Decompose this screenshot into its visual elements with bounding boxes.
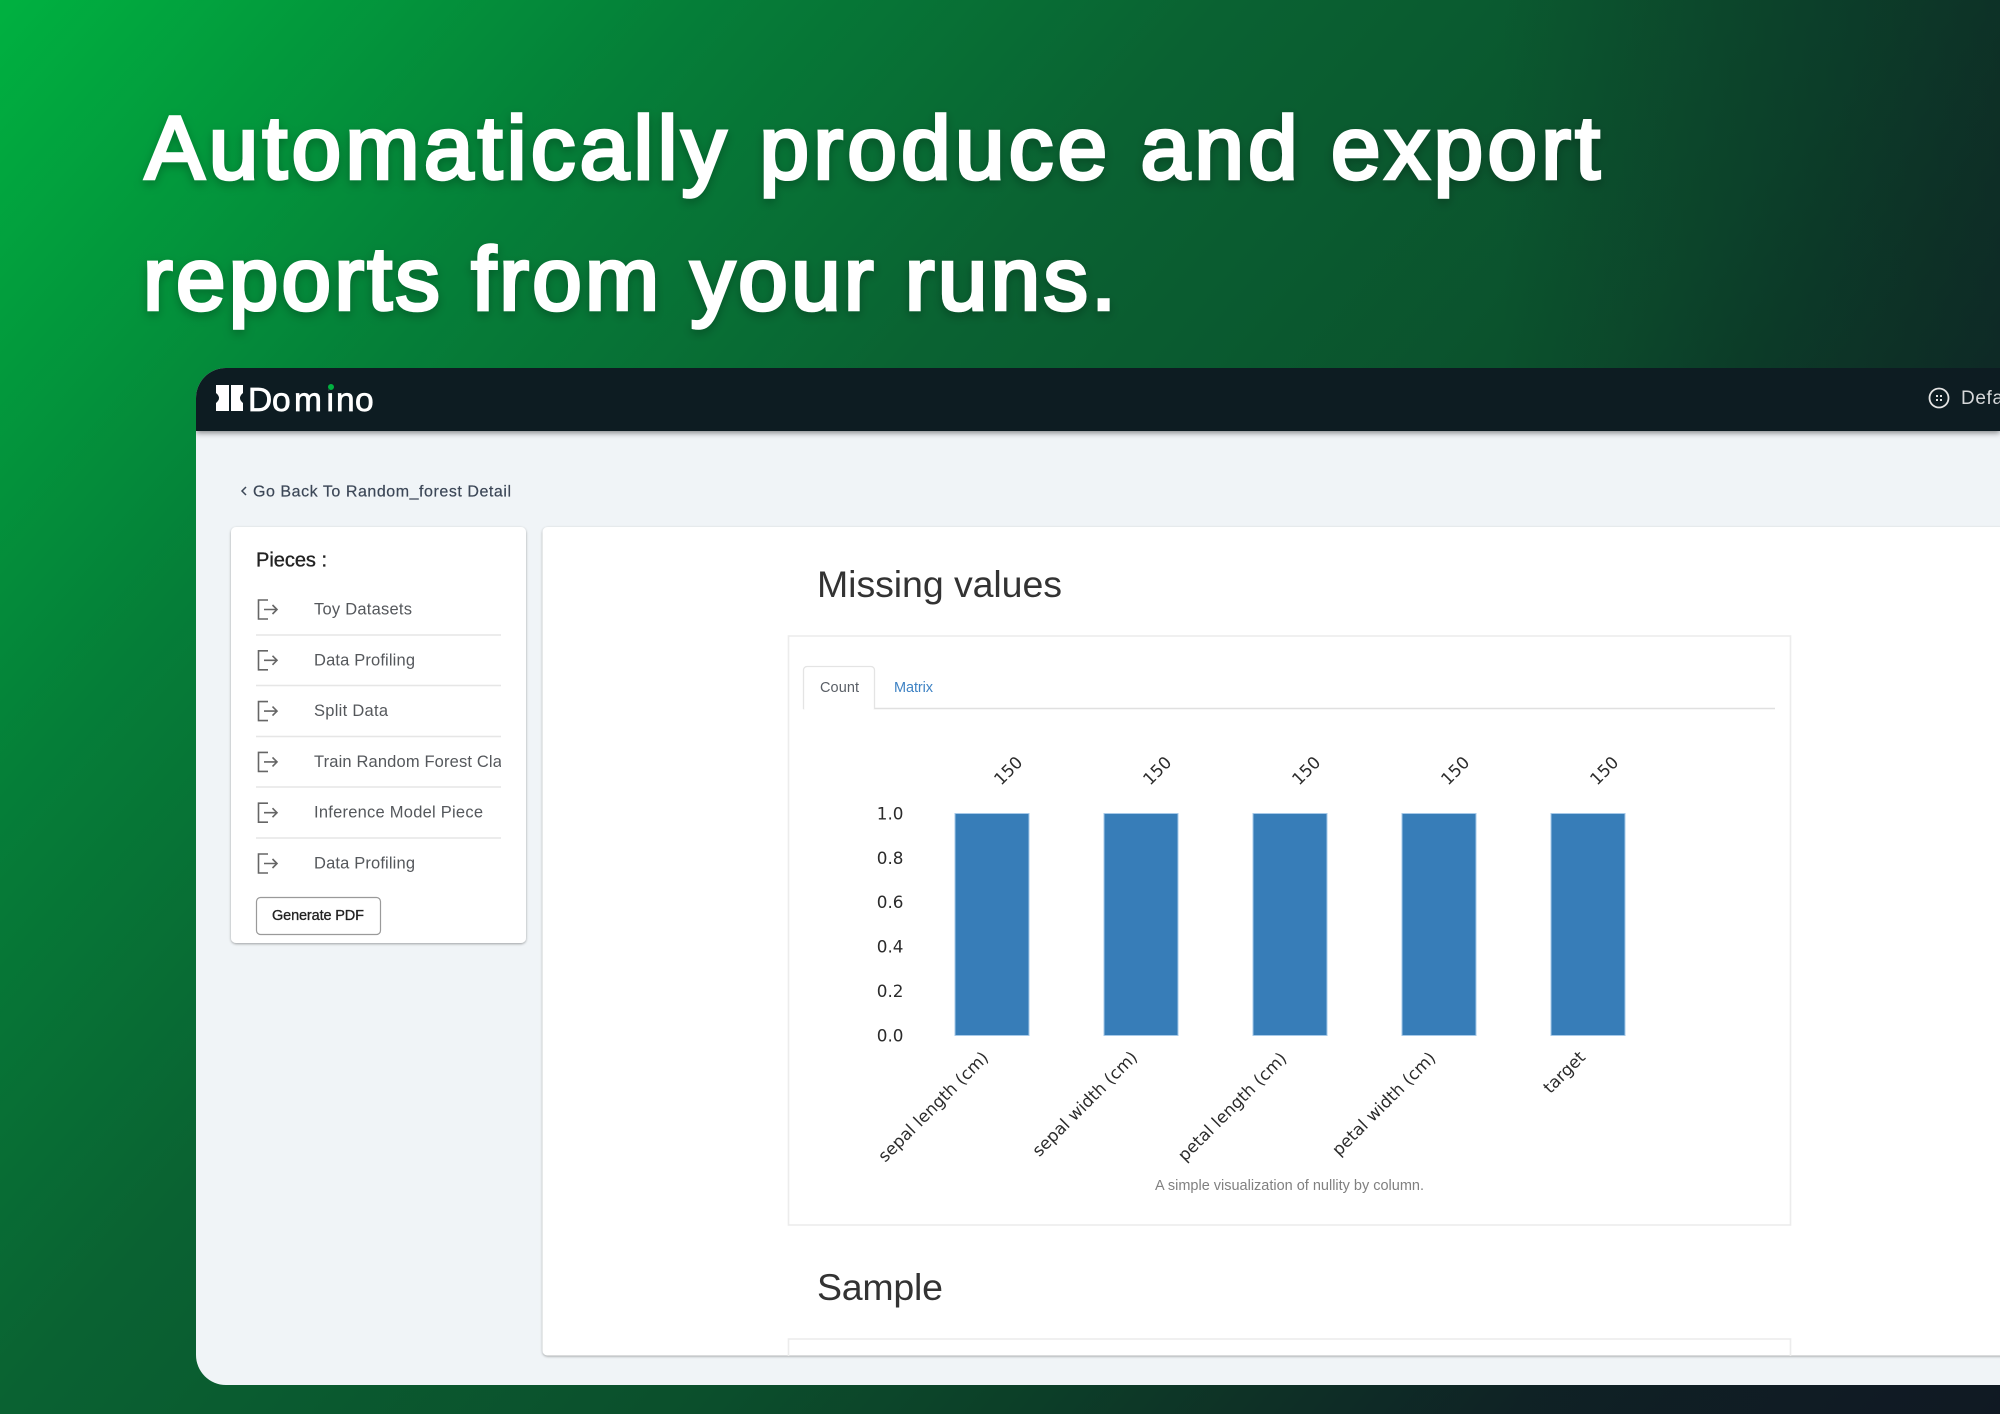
bar value labels: 150 [990,752,1026,789]
x axis labels: sepal length (cm) [874,1047,992,1166]
generate PDF button [256,898,380,934]
y axis labels: 0.2 [877,981,904,1001]
bar value labels: 150 [1139,752,1175,789]
panel: sample table container [788,1338,1792,1356]
y axis labels: 0.6 [877,892,904,912]
bar chart [874,752,1625,1166]
y axis labels: 0.0 [877,1026,904,1046]
x axis labels: petal width (cm) [1328,1048,1439,1159]
icon: workspace [1930,388,1948,408]
panel: chart container [788,636,1790,1225]
logo green dot [328,384,334,390]
top navigation bar [196,368,2000,431]
piece list: Data Profiling [314,652,415,670]
title [143,98,1600,328]
x axis labels [874,1047,1589,1166]
tabs [803,666,1775,710]
piece list: Train Random Forest Classifier [314,753,546,771]
panel: pieces sidebar [231,527,546,943]
panel: app window [196,368,2000,1399]
bar value labels: 150 [1586,752,1622,789]
heading: missing values: Missing values [817,563,1062,605]
y axis labels: 1.0 [877,804,904,824]
bar value labels: 150 [1437,752,1473,789]
bar value labels: 150 [1288,752,1324,789]
heading: sample: Sample [817,1266,943,1308]
x axis labels: sepal width (cm) [1028,1047,1141,1160]
panel: report content [542,527,2000,1399]
piece list: Split Data [314,702,389,720]
icon: Domino logo mark [216,385,243,411]
piece list: Toy Datasets [314,600,412,618]
x axis labels: petal length (cm) [1174,1048,1290,1165]
y axis labels: 0.4 [877,936,904,956]
window background [196,368,2000,1385]
sidebar heading: Pieces : [256,550,327,572]
logo wordmark: Domino [248,382,374,419]
back link: Go Back To Random_forest Detail [253,484,511,500]
bar value labels [994,757,1618,785]
piece list: Data Profiling [314,854,415,872]
piece list: Inference Model Piece [314,804,483,822]
generate PDF button: Generate PDF [272,908,364,924]
piece list [256,599,501,874]
tabs: Matrix [894,680,934,696]
title: Automatically produce and export [145,98,1600,198]
title: reports from your runs. [143,228,1116,328]
y axis labels: 0.8 [877,848,904,868]
tabs: Count [820,680,859,696]
bars [955,814,1625,1036]
y axis labels [877,804,904,1046]
x axis labels: target [1539,1047,1589,1097]
chart caption: A simple visualization of nullity by column. [1155,1178,1424,1194]
